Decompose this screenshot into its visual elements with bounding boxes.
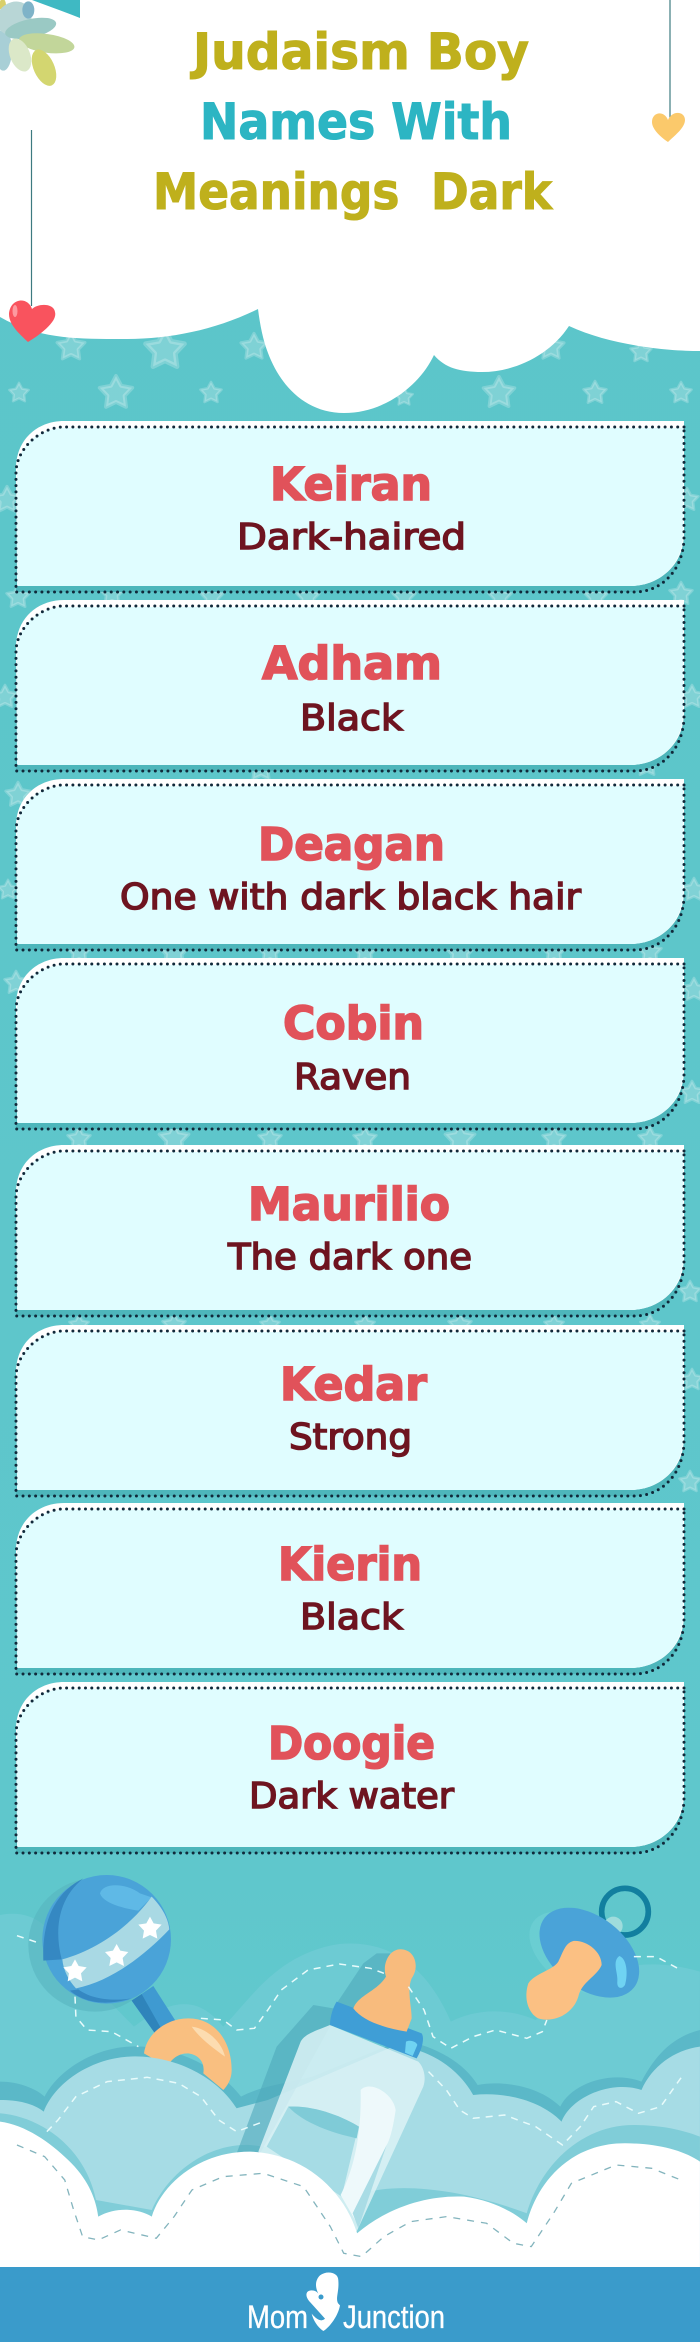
far cloud layer <box>0 1914 700 2187</box>
panel: Adham: Adham <box>262 637 442 690</box>
icon: pacifier <box>514 1888 656 2020</box>
panel: Kedar: Strong <box>289 1417 412 1458</box>
panel: Deagan: Deagan <box>258 818 445 871</box>
panel: Maurilio <box>16 1145 684 1316</box>
logo: MomJunction: Mom <box>247 2299 308 2335</box>
panel: Cobin <box>16 958 684 1129</box>
dashed stitching lines <box>17 1936 683 2257</box>
panel: Keiran: Dark-haired <box>237 517 466 558</box>
inner cloud band <box>0 2113 700 2267</box>
panel: Keiran: Keiran <box>270 458 432 511</box>
panel: Maurilio: Maurilio <box>248 1178 450 1231</box>
panel: Doogie <box>16 1682 684 1853</box>
white clouds bottom <box>0 2122 700 2268</box>
icon: rattle <box>28 1875 232 2090</box>
icon: yellow heart on string <box>652 0 685 142</box>
panel: Adham: Black <box>300 698 403 739</box>
icon: baby bottle <box>237 1949 425 2232</box>
panel: Kedar: Kedar <box>280 1358 428 1411</box>
panel: Cobin: Raven <box>294 1057 411 1098</box>
panel: Deagan <box>16 779 684 950</box>
dark cloud band <box>0 2030 700 2220</box>
title: Judaism Boy <box>190 23 529 81</box>
title <box>153 23 554 221</box>
icon: red heart on string <box>9 130 55 342</box>
logo: MomJunction: Junction <box>343 2299 445 2335</box>
icon: teal bunting flag <box>32 0 80 18</box>
top white cloud <box>0 0 700 413</box>
panel: Maurilio: The dark one <box>227 1237 472 1278</box>
panel: Doogie: Dark water <box>249 1776 454 1817</box>
footer bar <box>0 2267 700 2342</box>
panel: Kedar <box>16 1325 684 1496</box>
icon: watercolour leaves <box>0 0 76 90</box>
title: Names With <box>200 93 512 151</box>
panel: Keiran <box>16 421 684 592</box>
panel: Doogie: Doogie <box>268 1717 435 1770</box>
background stars <box>0 330 700 1491</box>
panel: Cobin: Cobin <box>283 997 424 1050</box>
panel: Adham <box>16 600 684 771</box>
panel: Kierin: Kierin <box>278 1538 422 1591</box>
panel: Deagan: One with dark black hair <box>120 877 581 918</box>
light cloud layer <box>0 2047 700 2253</box>
panel: Kierin: Black <box>300 1597 403 1638</box>
title: Meanings Dark <box>153 163 554 221</box>
panel: Kierin <box>16 1503 684 1674</box>
logo: MomJunction <box>247 2273 445 2335</box>
